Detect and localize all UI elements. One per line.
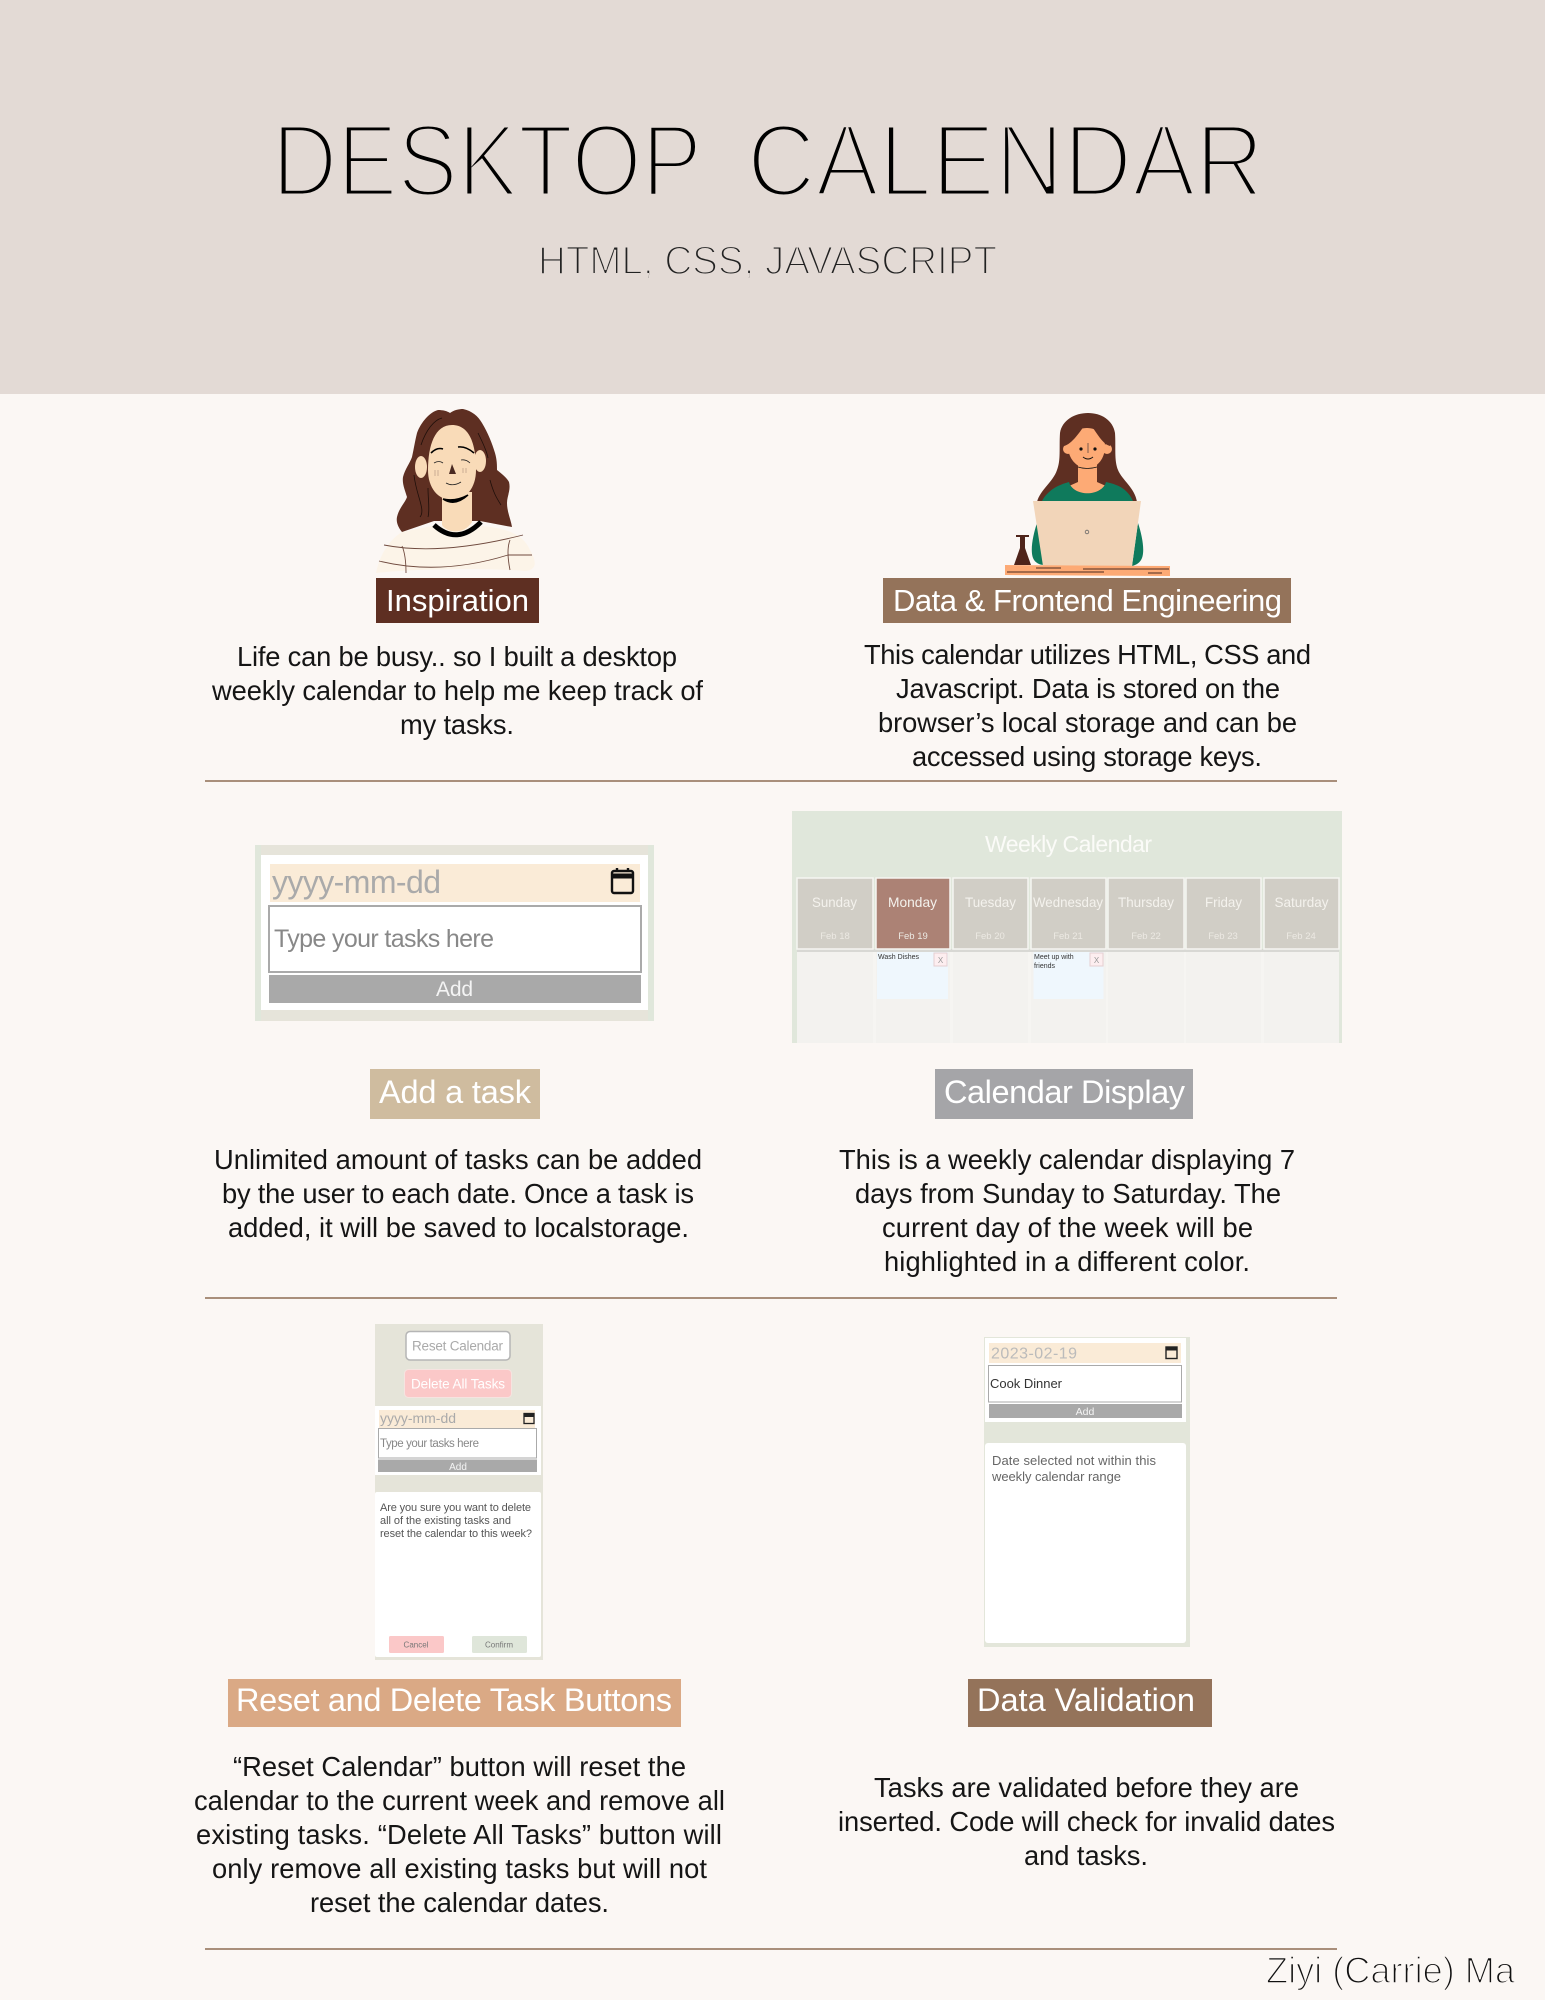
header banner xyxy=(0,0,1545,394)
title: DESKTOP xyxy=(272,103,702,218)
screenshot: weekly calendar xyxy=(792,811,1342,1043)
text: calendar display description: This is a weekly calendar displaying 7 xyxy=(839,1144,1295,1175)
screenshot: reset and delete buttons: Reset Calendar xyxy=(412,1338,504,1354)
label: add a task xyxy=(370,1069,540,1119)
text: add task description: Unlimited amount of tasks can be added xyxy=(214,1144,702,1175)
illustration: woman at laptop xyxy=(1005,413,1170,576)
screenshot: reset and delete buttons xyxy=(375,1324,543,1660)
text: reset and delete description: calendar to the current week and remove all xyxy=(194,1785,725,1816)
screenshot: data validation: Date selected not within this xyxy=(992,1453,1156,1468)
text: data description: accessed using storage keys. xyxy=(912,741,1262,772)
screenshot: weekly calendar: Feb 20 xyxy=(975,931,1005,942)
label: inspiration: Inspiration xyxy=(386,583,529,618)
screenshot: add task form: Add xyxy=(436,978,473,1001)
screenshot: data validation xyxy=(984,1337,1190,1647)
label: calendar display xyxy=(935,1069,1193,1119)
screenshot: reset and delete buttons: reset the calendar to this week? xyxy=(380,1528,532,1540)
text: reset and delete description: reset the calendar dates. xyxy=(310,1887,609,1918)
text: reset and delete description: existing tasks. “Delete All Tasks” button will xyxy=(196,1819,722,1850)
title xyxy=(272,103,1264,218)
screenshot: weekly calendar: friends xyxy=(1034,963,1056,970)
screenshot: weekly calendar: Feb 19 xyxy=(898,931,928,942)
screenshot: reset and delete buttons: Confirm xyxy=(485,1640,513,1650)
text: inspiration description xyxy=(211,641,703,740)
label: data and frontend engineering: Data & Frontend Engineering xyxy=(893,583,1282,618)
icon: calendar small xyxy=(1166,1347,1177,1358)
title: CALENDAR xyxy=(747,103,1264,218)
illustration: woman with wavy hair xyxy=(376,409,535,573)
label: data validation: Data Validation xyxy=(977,1682,1195,1718)
screenshot: weekly calendar: Feb 18 xyxy=(820,931,850,942)
text: calendar display description xyxy=(839,1144,1295,1277)
screenshot: add task form: yyyy-mm-dd xyxy=(272,864,441,900)
text: add task description: by the user to each date. Once a task is xyxy=(222,1178,694,1209)
text: data description xyxy=(864,639,1311,772)
text: data validation description: inserted. Code will check for invalid dates xyxy=(838,1806,1335,1837)
screenshot: data validation: Add xyxy=(1076,1406,1094,1418)
text: data validation description: Tasks are validated before they are xyxy=(874,1772,1299,1803)
screenshot: reset and delete buttons: Cancel xyxy=(404,1640,429,1650)
author signature: Ziyi (Carrie) Ma xyxy=(1266,1950,1515,1991)
text: add task description xyxy=(214,1144,702,1243)
screenshot: weekly calendar: Meet up with xyxy=(1034,954,1074,961)
screenshot: reset and delete buttons: Are you sure you want to delete xyxy=(380,1502,531,1514)
label: add a task: Add a task xyxy=(379,1074,532,1110)
label: data validation xyxy=(968,1679,1212,1727)
screenshot: weekly calendar: Feb 21 xyxy=(1053,931,1083,942)
label: inspiration xyxy=(376,578,539,623)
text: reset and delete description xyxy=(194,1751,725,1918)
screenshot: weekly calendar: Monday xyxy=(888,894,937,910)
screenshot: weekly calendar: Saturday xyxy=(1274,894,1328,910)
text: data description: This calendar utilizes HTML, CSS and xyxy=(864,639,1311,670)
screenshot: data validation: weekly calendar range xyxy=(991,1469,1121,1484)
screenshot: data validation: Cook Dinner xyxy=(990,1376,1063,1391)
screenshot: reset and delete buttons: yyyy-mm-dd xyxy=(380,1410,456,1426)
label: reset and delete task buttons: Reset and Delete Task Buttons xyxy=(236,1682,672,1718)
text: data validation description xyxy=(838,1772,1335,1871)
subtitle: HTML, CSS, JAVASCRIPT xyxy=(538,239,997,283)
screenshot: add task form xyxy=(255,845,654,1021)
screenshot: reset and delete buttons: all of the existing tasks and xyxy=(380,1515,511,1527)
label: calendar display: Calendar Display xyxy=(944,1074,1186,1110)
text: calendar display description: current day of the week will be xyxy=(882,1212,1253,1243)
screenshot: weekly calendar: Friday xyxy=(1205,894,1242,910)
text: inspiration description: Life can be busy.. so I built a desktop xyxy=(237,641,677,672)
screenshot: reset and delete buttons: Add xyxy=(449,1462,467,1473)
text: reset and delete description: only remove all existing tasks but will not xyxy=(212,1853,707,1884)
text: add task description: added, it will be saved to localstorage. xyxy=(228,1212,689,1243)
text: data description: Javascript. Data is stored on the xyxy=(896,673,1280,704)
icon: calendar xyxy=(612,868,633,893)
screenshot: weekly calendar: Weekly Calendar xyxy=(985,831,1152,857)
screenshot: add task form: Type your tasks here xyxy=(274,925,494,953)
screenshot: weekly calendar: X xyxy=(938,956,944,965)
text: data validation description: and tasks. xyxy=(1024,1840,1148,1871)
screenshot: weekly calendar: Feb 22 xyxy=(1131,931,1161,942)
screenshot: weekly calendar: X xyxy=(1094,956,1100,965)
screenshot: reset and delete buttons: Type your tasks here xyxy=(380,1438,479,1450)
text: inspiration description: weekly calendar to help me keep track of xyxy=(211,675,703,706)
screenshot: weekly calendar: Wash Dishes xyxy=(878,954,919,961)
text: calendar display description: days from Sunday to Saturday. The xyxy=(855,1178,1281,1209)
icon: small calendar xyxy=(524,1414,534,1424)
text: inspiration description: my tasks. xyxy=(400,709,514,740)
text: data description: browser’s local storage and can be xyxy=(878,707,1297,738)
text: calendar display description: highlighted in a different color. xyxy=(884,1246,1250,1277)
screenshot: weekly calendar: Tuesday xyxy=(965,894,1016,910)
text: reset and delete description: “Reset Calendar” button will reset the xyxy=(233,1751,686,1782)
screenshot: weekly calendar: Feb 24 xyxy=(1286,931,1316,942)
screenshot: weekly calendar: Sunday xyxy=(812,894,857,910)
screenshot: data validation: 2023-02-19 xyxy=(991,1346,1077,1362)
screenshot: weekly calendar: Wednesday xyxy=(1033,894,1103,910)
screenshot: reset and delete buttons: Delete All Tasks xyxy=(411,1376,505,1392)
screenshot: weekly calendar: Feb 23 xyxy=(1208,931,1238,942)
screenshot: weekly calendar: Thursday xyxy=(1118,894,1174,910)
